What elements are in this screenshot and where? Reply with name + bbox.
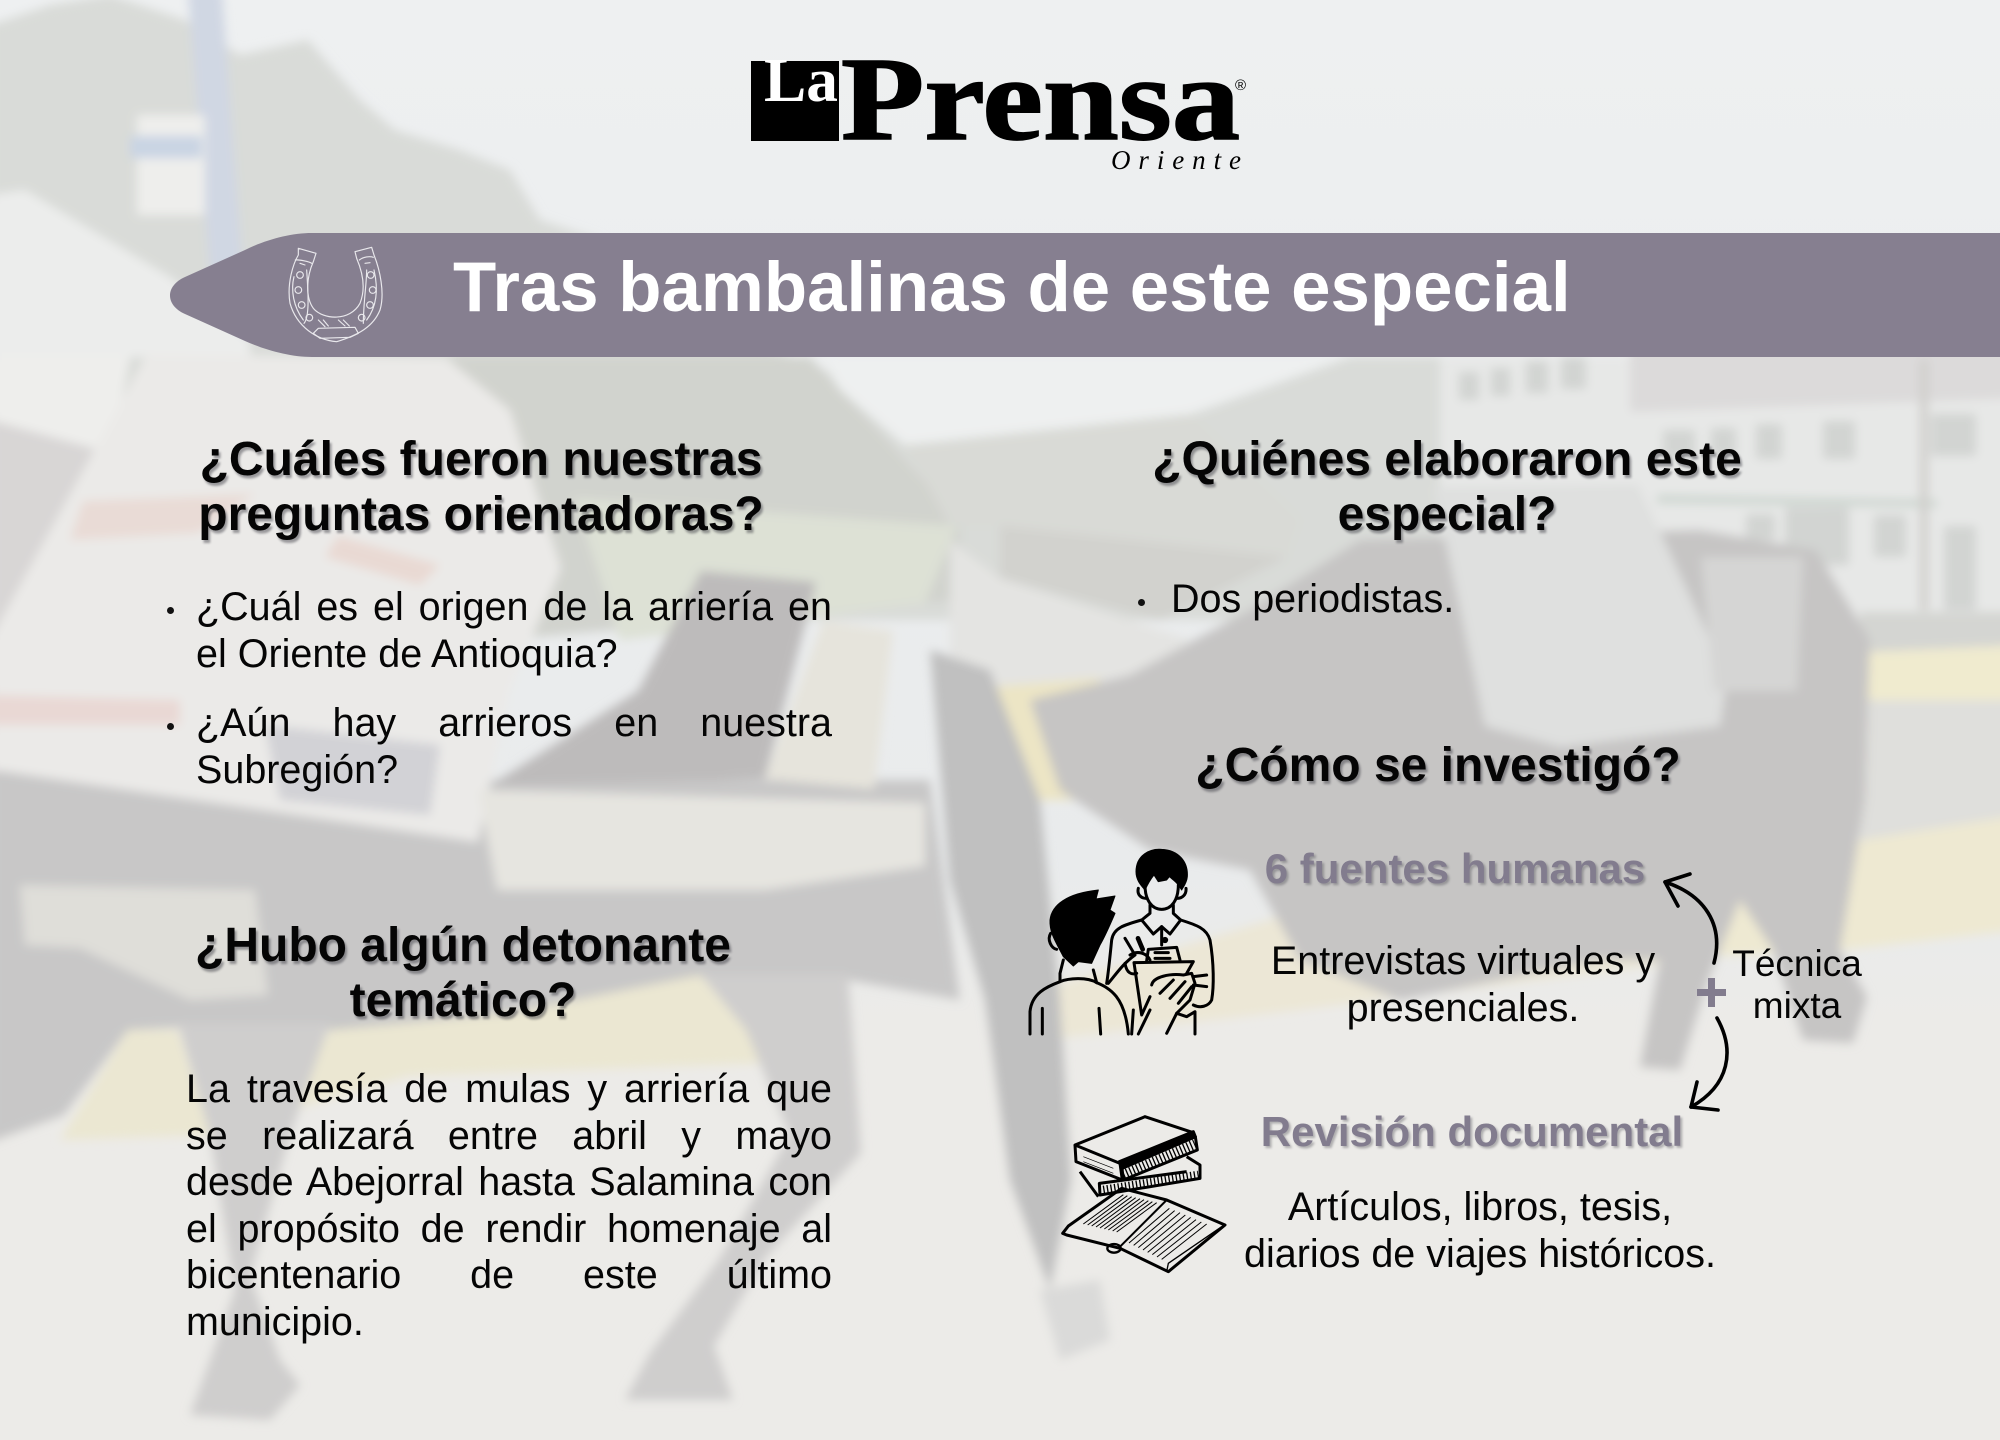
icon: interview (1028, 848, 1215, 1036)
paragraph: detonante: se realizará entre abril y mayo (186, 1114, 832, 1158)
heading: quiénes: especial? (1338, 488, 1556, 541)
list: preguntas: Subregión? (196, 748, 398, 792)
paragraph: detonante: municipio. (186, 1300, 364, 1344)
paragraph: detonante: el propósito de rendir homenaje al (186, 1206, 832, 1250)
paragraph: detonante: bicentenario de este último (186, 1253, 832, 1297)
text: técnica mixta: mixta (1753, 985, 1841, 1026)
list: preguntas: ¿Cuál es el origen de la arriería en (196, 585, 832, 629)
logo: La Prensa Oriente: La (764, 47, 838, 115)
heading: preguntas orientadoras: preguntas orientadoras? (198, 488, 764, 541)
text: artículos (1244, 1185, 1716, 1276)
heading: quiénes: ¿Quiénes elaboraron este (1152, 433, 1742, 486)
heading: revisión documental: Revisión documental (1261, 1108, 1683, 1155)
text: entrevistas (1271, 939, 1655, 1030)
paragraph: detonante: desde Abejorral hasta Salamina con (186, 1160, 832, 1204)
text: entrevistas: presenciales. (1347, 986, 1579, 1030)
mule 1 (0, 750, 960, 1142)
text: técnica mixta: Técnica (1732, 943, 1862, 984)
heading: preguntas orientadoras: ¿Cuáles fueron nuestras (200, 433, 762, 486)
title banner (170, 233, 2000, 357)
text: entrevistas: Entrevistas virtuales y (1271, 939, 1655, 983)
list: preguntas: el Oriente de Antioquia? (196, 632, 618, 676)
list: preguntas: ¿Aún hay arrieros en nuestra (196, 701, 832, 745)
logo: La Prensa Oriente (751, 33, 1246, 175)
title: Tras bambalinas de este especial (453, 248, 1571, 327)
icon: arrows and plus, técnica mixta (1663, 872, 1729, 1112)
icon: books (1061, 1115, 1227, 1274)
logo: La Prensa Oriente: Oriente (1111, 145, 1241, 175)
heading: cómo: ¿Cómo se investigó? (1195, 739, 1681, 792)
logo: La Prensa Oriente: ® (1235, 77, 1246, 94)
paragraph: detonante: La travesía de mulas y arriería que (186, 1067, 832, 1111)
logo: La Prensa Oriente: Prensa (841, 33, 1240, 165)
heading: quiénes (1152, 433, 1744, 544)
list: periodistas: Dos periodistas. (1171, 577, 1454, 621)
text: técnica mixta (1732, 943, 1862, 1026)
paragraph: detonante (186, 1067, 832, 1344)
heading: preguntas orientadoras (198, 433, 764, 544)
icon: horseshoe (288, 246, 383, 342)
heading: fuentes humanas: 6 fuentes humanas (1265, 845, 1645, 892)
heading: detonante (195, 919, 732, 1027)
list: preguntas (167, 585, 832, 792)
text: artículos: Artículos, libros, tesis, (1288, 1185, 1672, 1229)
text: artículos: diarios de viajes históricos. (1244, 1232, 1716, 1276)
heading: detonante: temático? (350, 974, 576, 1027)
heading: detonante: ¿Hubo algún detonante (195, 919, 731, 972)
mule 2 body (1030, 530, 1870, 1070)
